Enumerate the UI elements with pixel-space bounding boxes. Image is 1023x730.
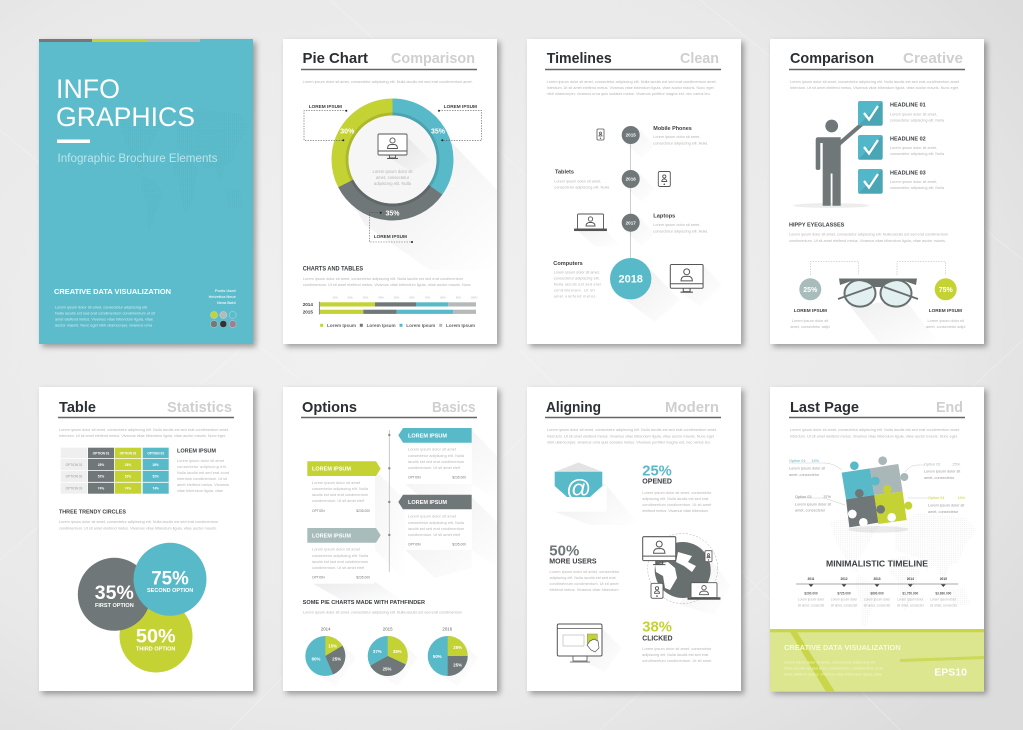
option card: teal: OPTION [408, 476, 421, 480]
stat: clicked: 38% [642, 619, 672, 636]
bar chart: 70% [425, 296, 431, 300]
minimalistic timeline: Lorem ipsum dolor [864, 598, 891, 602]
minimalistic timeline [796, 560, 958, 607]
table note: consectetur adipiscing elit. [177, 465, 227, 469]
cover heading: CREATIVE DATA VISUALIZATION [54, 289, 171, 296]
table note: amet eleifend metus. Vivamus [177, 483, 229, 487]
panel: pie chart: Lorem ipsum dolor sit amet, consectetur adipiscing elit. Nulla iaculis est sed erat condimentum amet. [303, 80, 473, 84]
panel: table: condimentum. Ut sit amet eleifend metus. Vivamus vitae bibendum ligula, vitae auctor mauris. [59, 526, 217, 530]
stat: clicked: Lorem ipsum dolor sit amet, consectetur [642, 647, 712, 651]
centre text: adipiscing elit. Nulla [374, 181, 412, 186]
centre text: Lorem ipsum dolor sit [372, 169, 413, 174]
circles diagram: 50% [136, 626, 176, 647]
centre text: amet, consectetur [376, 175, 410, 180]
timeline nodes: 2015 [626, 133, 636, 138]
option card: lime: Lorem ipsum dolor sit amet [312, 481, 361, 485]
font credits: Helvetica Neue [209, 295, 236, 299]
stat: opened: Lorem ipsum dolor sit amet, consectetur [642, 491, 712, 495]
timeline axis [388, 430, 390, 572]
stat: more users: condimentum condimentum. Ut sit amet [550, 582, 619, 586]
checklist: HEADLINE 01 [890, 103, 926, 109]
table note: Nulla iaculis est sed erat cond [177, 471, 229, 475]
icon: glasses [838, 278, 940, 344]
legend: Lorem Ipsum [446, 323, 475, 329]
panel: table [39, 387, 253, 691]
item: mobile phones: consectetur adipiscing elit. Nulla [653, 141, 708, 145]
pie chart: 2014: 25% [332, 656, 341, 662]
cover text: Nulla iaculis est sed erat condimentum condimentum ut sit [55, 312, 156, 316]
cover title [56, 74, 195, 132]
panel: last page: Interdum. Ut sit amet eleifend metus. Vivamus vitae bibendum ligula, vitae auctor mauris. Nunc eget. [790, 434, 958, 438]
bar chart: 10% [332, 296, 338, 300]
heading: Aligning [546, 399, 601, 416]
puzzle labels: Option 01 [789, 459, 805, 463]
item: computers: consectetur adipiscing elit. [554, 277, 600, 281]
bar chart: 50% [394, 296, 400, 300]
minimalistic timeline: 2013 [873, 577, 881, 581]
footer band: CREATIVE DATA VISUALIZATION [784, 645, 901, 652]
puzzle labels: Option 03 [795, 495, 811, 499]
option card: teal: LOREM IPSUM [408, 433, 447, 439]
table note: vitae bibendum ligula, vitae [177, 489, 223, 493]
table: 74% [125, 486, 131, 490]
heading: Timelines [547, 50, 612, 67]
stat: 25%: 25% [803, 287, 818, 294]
icon: envelope: @ [566, 475, 591, 503]
heading: Options [302, 399, 357, 416]
option card: lime: consectetur adipiscing elit. Nulla [312, 487, 369, 491]
table: 28% [125, 463, 131, 467]
option card: lime: OPTION [312, 509, 325, 513]
puzzle labels: Option 02 [924, 462, 940, 466]
puzzle labels: Lorem ipsum dolor sit [924, 470, 961, 474]
stat: opened: OPENED [642, 479, 672, 486]
option card: teal: iaculis est sed erat condimentum [408, 460, 464, 464]
stat: clicked: CLICKED [642, 636, 673, 643]
stat: clicked: condimentum condimentum. Ut sit amet [642, 659, 712, 663]
option card: gray: LOREM IPSUM [408, 500, 447, 506]
minimalistic timeline: 2012 [840, 577, 848, 581]
cover text: amet eleifend metus. Vivamus vitae bibendum ligula, vitae [55, 318, 153, 322]
stat: 75% [926, 278, 965, 329]
option card: teal [398, 428, 472, 483]
cover subtitle: Infographic Brochure Elements [58, 153, 218, 165]
stat: more users [549, 542, 620, 592]
callouts: 35% [385, 210, 400, 218]
heading [301, 50, 477, 70]
table note: Lorem ipsum dolor sit amet [177, 459, 225, 463]
item: computers: Computers [553, 261, 583, 267]
minimalistic timeline: Lorem ipsum dolor [798, 598, 825, 602]
option card: teal: Lorem ipsum dolor sit amet [408, 448, 457, 452]
circles diagram: THIRD OPTION [136, 647, 175, 653]
timeline nodes: 2018 [618, 274, 643, 286]
icon: globe with devices [643, 534, 730, 615]
bar chart [303, 296, 478, 314]
heading: Comparison [391, 50, 475, 67]
item: mobile phones: Lorem ipsum dolor sit amet, [653, 135, 700, 139]
minimalistic timeline: $3.680.000 [935, 592, 952, 596]
option card: teal: $235.000 [452, 476, 466, 480]
stat: 25%: Lorem ipsum dolor sit [792, 319, 829, 323]
option card: gray: iaculis est sed erat condimentum [408, 527, 464, 531]
stat: 25%: LOREM IPSUM [794, 308, 827, 314]
timeline nodes [610, 126, 680, 322]
bar chart: 30% [363, 296, 369, 300]
table: 52% [153, 474, 159, 478]
bar chart: 40% [378, 296, 384, 300]
minimalistic timeline: sit amet, consectet [930, 603, 957, 607]
minimalistic timeline: sit amet, consectet [831, 603, 857, 607]
pie chart: 2016: 25% [453, 662, 462, 668]
panel: aligning: Interdum. Ut sit amet eleifend metus. Vivamus vitae bibendum ligula, vitae auctor mauris. Nunc eget [547, 434, 715, 438]
circles diagram: SECOND OPTION [147, 588, 193, 594]
legend [320, 323, 475, 329]
minimalistic timeline: $1.750.000 [902, 592, 919, 596]
option card: pale: Lorem ipsum dolor sit amet [312, 548, 361, 552]
item: tablets: consectetur adipiscing elit. Nulla [554, 185, 610, 189]
panel: last page: Lorem ipsum dolor sit amet, consectetur adipiscing elit. Nulla iaculis est sed erat condimentum amet. [790, 428, 960, 432]
panel: aligning: nibh ullamcorper, vivamus urna quis sodales metus. Vivamus porttitor magna est, nec varius leo. [547, 440, 711, 444]
pie charts heading: SOME PIE CHARTS MADE WITH PATHFINDER [303, 600, 425, 606]
stat: 25% [790, 278, 830, 329]
puzzle labels: 25% [952, 462, 961, 466]
legend: Lorem Ipsum [367, 323, 396, 329]
item: laptops: Laptops [653, 214, 675, 220]
table: 74% [98, 486, 104, 490]
bar chart: 90% [456, 296, 462, 300]
option card: lime: iaculis est sed erat condimentum [312, 493, 368, 497]
callouts: LOREM IPSUM [374, 234, 407, 240]
table: OPTION 01 [66, 463, 83, 467]
puzzle labels: amet, consectetur [795, 508, 826, 512]
minimalistic timeline: 2011 [808, 577, 815, 581]
panel: options [283, 387, 497, 691]
minimalistic timeline: $200.000 [804, 592, 818, 596]
bar chart: 100% [470, 296, 478, 300]
checklist: HEADLINE 02 [890, 136, 926, 142]
bar chart: 20% [347, 296, 353, 300]
table: 74% [153, 486, 159, 490]
stat: more users: Lorem ipsum dolor sit amet, consectetur [550, 570, 620, 574]
timeline line [630, 143, 632, 262]
checklist: consectetur adipiscing elit. Nulla [890, 186, 945, 190]
option card: lime: LOREM IPSUM [312, 467, 351, 473]
callouts: 30% [340, 128, 355, 136]
stat: more users: MORE USERS [549, 559, 597, 566]
panel: comparison: condimentum. Ut sit amet eleifend metus. Vivamus vitae bibendum ligula, vitae auctor mauris. [789, 239, 946, 243]
puzzle labels: Option 04 [928, 496, 944, 500]
footer band: amet eleifend metus. Vivamus vitae bibendum ligula, vitae [784, 672, 882, 676]
option card: teal: consectetur adipiscing elit. Nulla [408, 454, 465, 458]
heading [545, 50, 721, 70]
checklist: HEADLINE 03 [890, 170, 926, 176]
panel: comparison [770, 39, 984, 344]
checklist: Lorem ipsum dolor sit amet, [890, 112, 937, 116]
cover title: GRAPHICS [56, 102, 195, 132]
panel: pie chart: condimentum. Ut sit amet eleifend metus. Vivamus vitae bibendum ligula, vitae auctor mauris. Nunc [303, 283, 471, 287]
heading: Pie Chart [302, 50, 368, 67]
circles diagram: 75% [151, 568, 189, 589]
table: OPTION 02 [120, 451, 137, 455]
item: computers: Lorem ipsum dolor sit amet, [554, 271, 600, 275]
table: 52% [125, 474, 131, 478]
item: laptops: consectetur adipiscing elit. Nulla [653, 229, 708, 233]
item: laptops [574, 214, 708, 247]
checklist [858, 101, 945, 194]
option card: gray [398, 495, 472, 550]
item: mobile phones [597, 126, 708, 145]
pie chart: 2015 [368, 626, 418, 686]
circles diagram: 35% [95, 583, 134, 604]
stat: opened: adipiscing elit. Nulla iaculis est sed erat [642, 497, 709, 501]
circles diagram: FIRST OPTION [95, 603, 134, 609]
item: laptops: Lorem ipsum dolor sit amet, [653, 223, 700, 227]
item: tablets [554, 170, 670, 189]
option card: pale: iaculis est sed erat condimentum [312, 560, 368, 564]
checklist: consectetur adipiscing elit. Nulla [890, 118, 945, 122]
minimalistic timeline: $800.000 [870, 592, 884, 596]
pie chart: 2016: 50% [433, 654, 442, 659]
cover text [55, 306, 156, 328]
table: OPTION 02 [66, 474, 83, 478]
item: computers: Nulla iaculis est sed erat [554, 283, 602, 287]
pie chart: 2015: 37% [373, 649, 382, 654]
pie chart: 2015: 38% [393, 649, 402, 654]
minimalistic timeline: sit amet, consectet [897, 603, 924, 607]
stat: opened: 25% [642, 463, 672, 480]
checklist: Lorem ipsum dolor sit amet, [890, 146, 937, 150]
donut chart [340, 107, 445, 212]
pie chart: 2016: 25% [453, 645, 462, 650]
minimalistic timeline: Lorem ipsum dolor [930, 598, 957, 602]
stat: 75%: amet, consectetur adipi [926, 325, 965, 329]
pie chart: 2015: 2015 [383, 626, 393, 632]
heading: Creative [903, 50, 963, 67]
heading [545, 399, 721, 418]
puzzle labels [789, 459, 966, 514]
table: 52% [98, 474, 104, 478]
heading: Last Page [790, 399, 859, 416]
heading [301, 399, 477, 418]
minimalistic timeline: Lorem ipsum dolor [897, 598, 924, 602]
table: OPTION 03 [147, 451, 164, 455]
table [61, 448, 169, 494]
heading: Statistics [167, 399, 232, 416]
panel: options: Lorem ipsum dolor sit amet, consectetur adipiscing elit. Nulla iaculis est sed erat condimentum [303, 610, 462, 614]
puzzle [842, 456, 912, 533]
timeline nodes: 2016 [626, 177, 636, 182]
stat: more users: 50% [549, 542, 579, 559]
charts and tables heading: CHARTS AND TABLES [303, 266, 363, 272]
stat: opened: eleifend metus. Vivamus vitae bibendum [642, 509, 708, 513]
bar chart: 80% [440, 296, 446, 300]
option card: pale: LOREM IPSUM [312, 534, 351, 540]
stat: more users: adipiscing elit. Nulla iaculis est sed erat [550, 576, 616, 580]
font credits [209, 289, 236, 305]
heading [789, 399, 965, 418]
pie chart: 2015: 25% [383, 666, 391, 672]
panel: table: Lorem ipsum dolor sit amet, consectetur adipiscing elit. Nulla iaculis est sed erat condimentum [59, 520, 218, 524]
panel: comparison: Interdum. Ut sit amet eleifend metus. Vivamus vitae bibendum ligula, vitae auctor mauris. Nunc eget [790, 86, 959, 90]
stat: opened [642, 463, 712, 513]
stat: 75%: 75% [939, 287, 953, 294]
heading: Clean [680, 50, 719, 67]
legend: Lorem Ipsum [406, 323, 435, 329]
timeline nodes: 2017 [626, 220, 636, 225]
heading [58, 399, 234, 418]
pie chart: 2014: 2014 [321, 626, 331, 632]
pie chart: 2016: 2016 [442, 626, 453, 632]
minimalistic timeline: 2015 [940, 577, 947, 581]
world map [830, 507, 977, 628]
panel: timelines [527, 39, 741, 344]
circles diagram [78, 543, 206, 672]
puzzle labels: amet, consectetur [924, 476, 955, 480]
puzzle labels: Lorem ipsum dolor sit [789, 466, 826, 470]
panel: timelines: nibh ullamcorper, vivamus urna quis sodales metus. Vivamus porttitor magna est, nec varius leo. [547, 92, 711, 96]
stat: clicked: adipiscing elit. Nulla iaculis est sed erat [642, 653, 709, 657]
minimalistic timeline: sit amet, consectet [798, 603, 824, 607]
option card: lime [307, 461, 381, 517]
option card: teal: condimentum. Ut sit amet eleif [408, 466, 461, 470]
stat: opened: condimentum condimentum. Ut sit amet [642, 503, 712, 507]
heading [789, 50, 965, 70]
option card: pale: consectetur adipiscing elit. Nulla [312, 554, 369, 558]
bar chart: 2014 [303, 302, 313, 307]
dashed connectors [810, 262, 946, 275]
callouts: 35% [431, 128, 446, 136]
table note: Interdum condimentum. Ut sit [177, 477, 228, 481]
icon: person pointing [793, 120, 869, 208]
stat: 75%: Lorem ipsum dolor sit [928, 319, 965, 323]
item: computers: amet eleifend metus. [554, 295, 597, 299]
puzzle labels: amet, consectetur [789, 473, 820, 477]
puzzle labels: 37% [823, 495, 832, 499]
checklist: Lorem ipsum dolor sit amet, [890, 180, 937, 184]
panel: pie chart: Lorem ipsum dolor sit amet, consectetur adipiscing elit. Nulla iaculis est sed erat condimentum [303, 277, 463, 281]
callouts [304, 104, 482, 243]
heading: Basics [432, 399, 476, 416]
option card: gray: OPTION [408, 543, 421, 547]
option card: gray: Lorem ipsum dolor sit amet [408, 514, 457, 518]
stat: 25%: amet, consectetur adipi [790, 325, 830, 329]
minimalistic timeline: MINIMALISTIC TIMELINE [826, 560, 929, 569]
panel: cover page [39, 39, 253, 344]
heading: Comparison [790, 50, 874, 67]
panel: pie chart [283, 39, 497, 344]
option card: pale: condimentum. Ut sit amet eleif [312, 566, 365, 570]
puzzle labels: Lorem ipsum dolor sit [928, 504, 965, 508]
card shadows [310, 430, 497, 602]
panel: aligning: Lorem ipsum dolor sit amet, consectetur adipiscing elit. Nulla iaculis est sed erat condimentum amet. [547, 428, 717, 432]
table: OPTION 03 [66, 486, 83, 490]
item: computers [553, 261, 722, 306]
option card: pale [307, 528, 381, 584]
heading: Modern [665, 399, 719, 416]
font credits: Nexa Bold [217, 301, 236, 305]
cover text: Lorem ipsum dolor sit amet, consectetur adipiscing elit. [55, 306, 148, 310]
puzzle labels: Lorem ipsum dolor sit [795, 502, 832, 506]
cover text: auctor mauris. Nunc eget nibh ullamcorper, vivamus urna [55, 324, 153, 328]
item: mobile phones: Mobile Phones [653, 126, 692, 132]
footer band: Nulla iaculis est sed erat condimentum condimentum ut sit [784, 666, 884, 670]
pie chart: 2016 [428, 626, 478, 686]
hippy eyeglasses heading: HIPPY EYEGLASSES [789, 222, 845, 228]
table: 28% [153, 463, 159, 467]
bar chart: 2015 [303, 310, 313, 314]
minimalistic timeline: Lorem ipsum dolor [831, 598, 858, 602]
option card: gray: condimentum. Ut sit amet eleif [408, 533, 461, 537]
option card: gray: $235.000 [452, 543, 466, 547]
icon: envelope [555, 462, 640, 525]
heading: Table [59, 399, 96, 416]
pie chart: 2014: 15% [328, 644, 337, 648]
panel: comparison: Lorem ipsum dolor sit amet, consectetur adipiscing elit. Nulla iaculis est sed erat condimentum [789, 232, 948, 236]
option card: lime: condimentum. Ut sit amet eleif [312, 499, 365, 503]
panel: table: Interdum. Ut sit amet eleifend metus. Vivamus vitae bibendum ligula, vitae auctor mauris. Nunc eget. [59, 434, 226, 438]
footer band [770, 629, 984, 692]
long shadow [345, 130, 497, 270]
footer band: Lorem ipsum dolor sit amet, consectetur adipiscing elit. [784, 660, 876, 664]
table note [177, 448, 229, 493]
panel: table: Lorem ipsum dolor sit amet, consectetur adipiscing elit. Nulla iaculis est sed erat condimentum amet. [59, 428, 229, 432]
panel: timelines: Interdum. Ut sit amet eleifend metus. Vivamus vitae bibendum ligula, vitae auctor mauris. Nunc eget [547, 86, 715, 90]
legend: Lorem Ipsum [327, 323, 356, 329]
icon: monitor [378, 134, 430, 172]
option card: gray: consectetur adipiscing elit. Nulla [408, 521, 465, 525]
minimalistic timeline: $725.000 [837, 592, 851, 596]
callouts: LOREM IPSUM [309, 104, 342, 110]
footer band: EPS10 [934, 668, 967, 679]
three trendy circles heading: THREE TRENDY CIRCLES [59, 510, 126, 516]
stat: 75%: LOREM IPSUM [929, 308, 962, 314]
panel: comparison: Lorem ipsum dolor sit amet, consectetur adipiscing elit. Nulla iaculis est sed erat condimentum amet. [790, 80, 960, 84]
stat: clicked [642, 619, 712, 663]
checklist: consectetur adipiscing elit. Nulla [890, 152, 945, 156]
option card: pale: OPTION [312, 576, 325, 580]
item: computers: condimentum. Ut sit [554, 289, 596, 293]
table: 28% [98, 463, 104, 467]
table note: LOREM IPSUM [177, 448, 216, 454]
minimalistic timeline: 2014 [907, 577, 914, 581]
heading: End [936, 399, 963, 416]
font credits: Fonts Used [215, 289, 236, 293]
puzzle labels: 15% [811, 459, 820, 463]
option card: lime: $235.000 [356, 509, 370, 513]
puzzle labels: amet, consectetur [928, 510, 959, 514]
icon: clicking screen [557, 624, 622, 672]
pie chart: 2014: 60% [312, 656, 320, 662]
puzzle labels: 14% [957, 496, 966, 500]
table: OPTION 01 [93, 451, 110, 455]
centre text [372, 169, 413, 186]
panel: aligning [527, 387, 741, 691]
callouts: LOREM IPSUM [444, 104, 477, 110]
item: tablets: Tablets [555, 170, 574, 176]
minimalistic timeline: sit amet, consectet [864, 603, 890, 607]
cover title: INFO [56, 74, 120, 104]
item: tablets: Lorem ipsum dolor sit amet, [554, 179, 601, 183]
panel: timelines: Lorem ipsum dolor sit amet, consectetur adipiscing elit. Nulla iaculis est sed erat condimentum amet. [547, 80, 717, 84]
option card: pale: $235.000 [356, 576, 370, 580]
bar chart: 60% [409, 296, 415, 300]
pie chart: 2014 [305, 626, 356, 686]
stat: more users: eleifend metus. Vivamus vitae bibendum [550, 588, 618, 592]
colour swatches [210, 312, 236, 328]
panel: last page [770, 387, 984, 692]
